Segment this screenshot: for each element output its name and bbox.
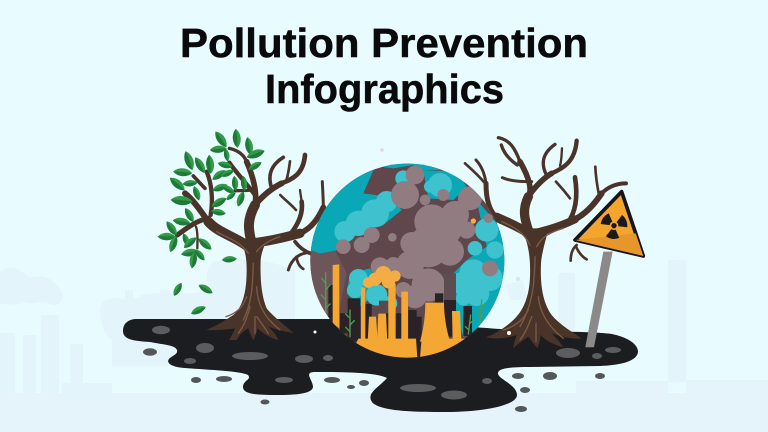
right tree trunk (486, 228, 582, 348)
left tree branches (177, 148, 323, 270)
right tree branches (465, 138, 626, 261)
radiation symbol (601, 213, 627, 239)
left tree bark highlights (217, 232, 280, 333)
title: Pollution Prevention (180, 20, 588, 66)
warning sign (575, 192, 647, 347)
globe left smoke edge (310, 250, 346, 322)
globe (310, 164, 504, 358)
title (180, 20, 588, 112)
globe factory orange ground and chimneys (332, 264, 465, 358)
left tree with leaves (158, 129, 323, 341)
oil spill puddle (123, 319, 638, 412)
right dead tree (465, 138, 626, 348)
specks (314, 148, 520, 335)
left tree trunk (206, 240, 294, 341)
background: faded industrial skyline (0, 259, 768, 432)
globe light clouds (334, 170, 504, 311)
globe oceans (310, 160, 510, 337)
sign triangle (575, 192, 647, 258)
globe smoke (336, 166, 498, 308)
globe orange smoke (363, 218, 476, 288)
oil spots inside puddle (152, 326, 621, 400)
falling leaves (171, 255, 237, 317)
left tree leaves (158, 129, 266, 269)
right tree bark highlights (502, 222, 563, 342)
globe factory dark buildings (328, 273, 472, 358)
globe land (307, 160, 510, 363)
globe green plants (321, 273, 485, 337)
oil droplets outside puddle (143, 348, 605, 412)
title: Infographics (265, 66, 504, 112)
sign post (585, 252, 613, 347)
